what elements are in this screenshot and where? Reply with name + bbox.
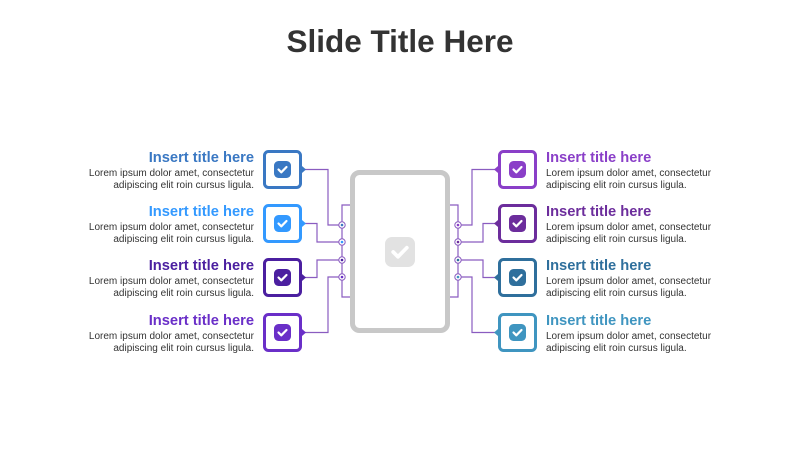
item left 3: adipiscing elit roin cursus ligula. xyxy=(113,288,254,299)
item left 1: adipiscing elit roin cursus ligula. xyxy=(113,180,254,191)
item right 1: Lorem ipsum dolor amet, consectetur xyxy=(546,168,712,179)
item left 4: Lorem ipsum dolor amet, consectetur xyxy=(89,331,255,342)
item left 2: Insert title here xyxy=(149,204,254,220)
item left 2: adipiscing elit roin cursus ligula. xyxy=(113,234,254,245)
item right 1: Insert title here xyxy=(546,150,651,166)
item left 2: Lorem ipsum dolor amet, consectetur xyxy=(89,222,255,233)
item right 2: Insert title here xyxy=(546,204,651,220)
connector nodes xyxy=(339,222,461,280)
item left 3: Insert title here xyxy=(149,258,254,274)
item right 2: Lorem ipsum dolor amet, consectetur xyxy=(546,222,712,233)
item left 1 xyxy=(89,150,306,191)
item right 4: Insert title here xyxy=(546,313,651,329)
item right 3: adipiscing elit roin cursus ligula. xyxy=(546,288,687,299)
item left 4 xyxy=(89,313,306,354)
item right 2: adipiscing elit roin cursus ligula. xyxy=(546,234,687,245)
item right 4: adipiscing elit roin cursus ligula. xyxy=(546,343,687,354)
item left 3 xyxy=(89,258,306,299)
item right 3 xyxy=(494,258,712,299)
item right 1: adipiscing elit roin cursus ligula. xyxy=(546,180,687,191)
item right 4: Lorem ipsum dolor amet, consectetur xyxy=(546,331,712,342)
item right 1 xyxy=(494,150,712,191)
item left 2 xyxy=(89,204,306,245)
item left 1: Lorem ipsum dolor amet, consectetur xyxy=(89,168,255,179)
title: Slide Title Here xyxy=(286,23,514,59)
item right 3: Insert title here xyxy=(546,258,651,274)
item left 3: Lorem ipsum dolor amet, consectetur xyxy=(89,276,255,287)
item right 3: Lorem ipsum dolor amet, consectetur xyxy=(546,276,712,287)
item left 1: Insert title here xyxy=(149,150,254,166)
central device xyxy=(352,172,448,330)
item left 4: adipiscing elit roin cursus ligula. xyxy=(113,343,254,354)
item left 4: Insert title here xyxy=(149,313,254,329)
item right 4 xyxy=(494,313,712,354)
connectors xyxy=(303,170,497,332)
item right 2 xyxy=(494,204,712,245)
